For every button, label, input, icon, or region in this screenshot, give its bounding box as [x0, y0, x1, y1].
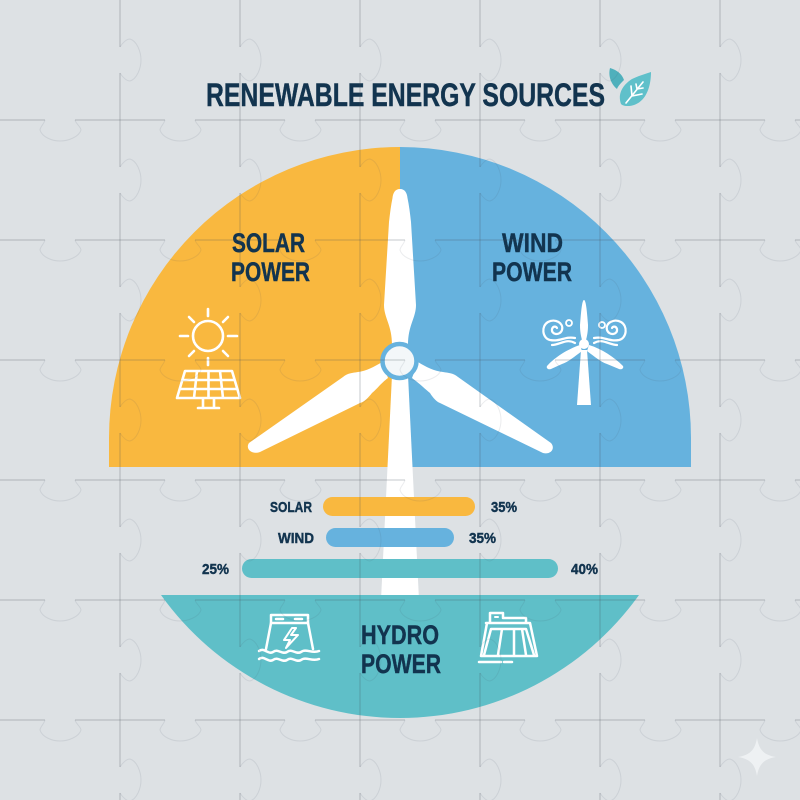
bar labels and values	[202, 499, 598, 578]
icon: large turbine	[248, 189, 553, 600]
turbine tower	[381, 375, 419, 600]
hydro power heading	[361, 620, 441, 679]
panel: wind power	[400, 147, 691, 467]
solar power heading	[231, 228, 310, 287]
title: RENEWABLE ENERGY SOURCES	[206, 77, 605, 113]
icon: sparkle	[738, 738, 776, 776]
icon: wind turbine with swirls	[543, 300, 626, 405]
icon: sun and solar panel	[177, 309, 240, 408]
hydro power heading: HYDRO	[361, 620, 439, 650]
icon: dam	[479, 613, 537, 662]
wind power heading: WIND	[502, 228, 563, 258]
bar labels and values: 35%	[491, 499, 517, 516]
wind power heading: POWER	[492, 257, 572, 287]
icon: hydro power station	[259, 615, 319, 661]
wind bar	[326, 528, 454, 547]
icon: leaf	[609, 68, 651, 106]
bar labels and values: SOLAR	[270, 499, 312, 516]
solar power heading: POWER	[231, 257, 310, 287]
solar bar	[323, 497, 475, 516]
wind power heading	[492, 228, 572, 287]
bar labels and values: 40%	[571, 561, 598, 578]
bar labels and values: WIND	[278, 530, 314, 547]
turbine blades	[248, 189, 416, 453]
panel: solar power	[109, 147, 400, 467]
bar labels and values: 25%	[202, 561, 229, 578]
bar labels and values: 35%	[469, 530, 496, 547]
panel: hydro power	[161, 595, 639, 718]
bar chart	[202, 497, 598, 578]
turbine hub	[382, 344, 416, 378]
solar power heading: SOLAR	[232, 228, 305, 258]
hydro bar	[242, 559, 558, 578]
hydro power heading: POWER	[361, 649, 441, 679]
